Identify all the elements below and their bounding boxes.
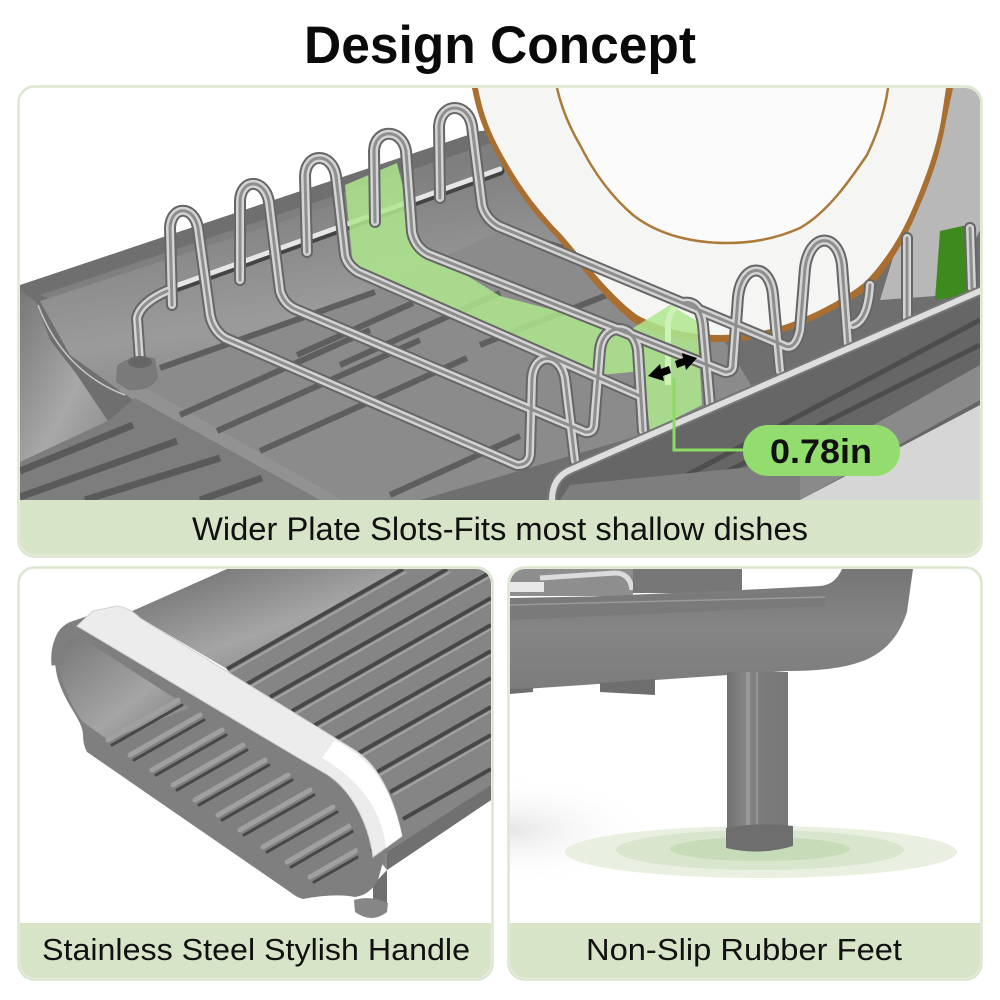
callout: 0.78in: [743, 425, 900, 476]
panel: stainless steel handle: [18, 568, 492, 980]
panel: wider plate slots: [18, 86, 982, 556]
leg: [726, 672, 793, 852]
callout: 0.78in: 0.78in: [770, 433, 872, 471]
caption band: wider plate slots: [20, 500, 980, 555]
inner ribs: [108, 700, 370, 882]
chrome wire racks: [137, 108, 980, 500]
title: Design Concept: [304, 16, 696, 75]
curved trough behind handle: [130, 569, 410, 669]
ribbed mat: [227, 569, 491, 870]
tray: gray base with ribs: [20, 88, 980, 500]
tray front section below rail: [555, 291, 980, 500]
green highlight between slots: [345, 163, 702, 431]
plate: [472, 88, 953, 342]
rim ledge: [510, 596, 602, 620]
arrow: slot width: [648, 353, 697, 381]
rack foot peg: [116, 356, 158, 390]
ground shadow rings: [565, 826, 957, 878]
base plate and handle frame: [53, 606, 400, 899]
ghost hairpin inside green: [665, 306, 678, 385]
second plate behind: [880, 88, 980, 300]
opening of handle: [62, 649, 190, 738]
foot: [354, 870, 388, 918]
white handle band: [77, 606, 402, 857]
caption band: wider plate slots: Wider Plate Slots-Fits most shallow dishes: [192, 511, 808, 547]
caption band: rubber feet: Non-Slip Rubber Feet: [586, 932, 902, 967]
callout leader line: [674, 378, 745, 450]
rack interior: [510, 569, 742, 596]
caption band: handle: [20, 923, 491, 978]
chrome rail behind hairpins: [167, 169, 500, 291]
faint floor shadow: [510, 806, 574, 854]
caption band: rubber feet: [510, 923, 980, 978]
handle frame rim: [58, 630, 368, 880]
panel: rubber feet: [507, 566, 983, 981]
caption band: handle: Stainless Steel Stylish Handle: [42, 932, 470, 967]
under-body blocks: [510, 679, 655, 695]
rack body: [510, 569, 913, 690]
